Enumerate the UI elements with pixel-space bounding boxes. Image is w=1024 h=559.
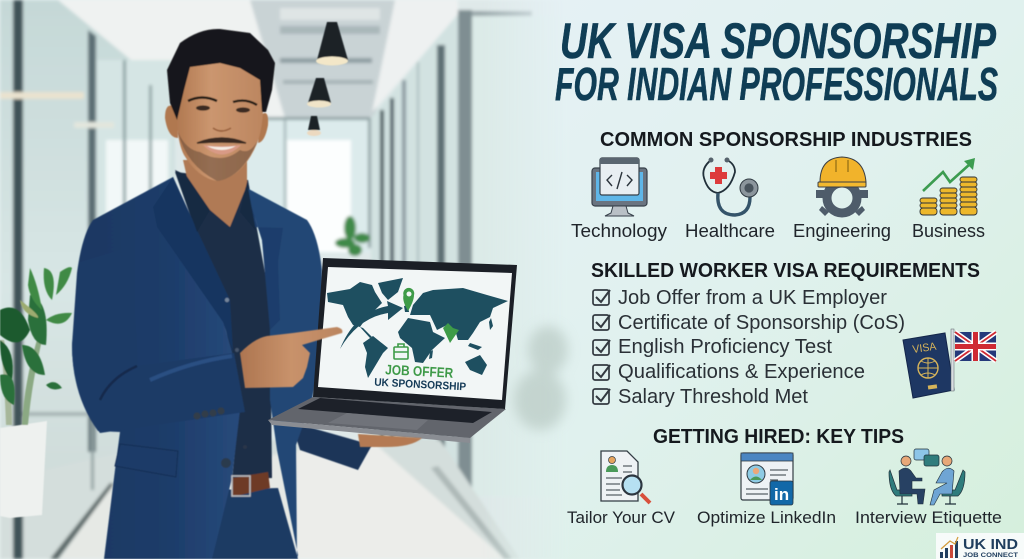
icon: healthcare stethoscope [703, 158, 758, 215]
trousers [210, 488, 298, 559]
pointing hand [240, 327, 342, 388]
moustache and smile [197, 138, 246, 143]
right lapel [245, 187, 283, 330]
neck [183, 160, 247, 227]
icon: optimize linkedin profile: in [774, 485, 789, 504]
section heading: getting hired key tips: GETTING HIRED: KEY TIPS [653, 426, 904, 448]
logo: UK IND job connect [936, 533, 1024, 559]
item: job offer: Job Offer from a UK Employer [618, 287, 887, 309]
laptop screen [318, 267, 512, 400]
label: tailor your cv: Tailor Your CV [567, 508, 676, 527]
item: certificate: Certificate of Sponsorship (CoS) [618, 312, 905, 334]
icon: passport and UK flag: VISA [912, 341, 938, 356]
ears [165, 106, 178, 138]
title [555, 13, 998, 110]
item: salary: Salary Threshold Met [618, 386, 808, 408]
icon: passport and UK flag [903, 329, 996, 398]
right information panel background [460, 0, 1024, 559]
label: technology: Technology [571, 221, 667, 241]
logo: UK IND job connect: JOB CONNECT [963, 552, 1018, 559]
label: business: Business [912, 221, 985, 241]
belt [232, 472, 270, 497]
label: optimize linkedin: Optimize LinkedIn [697, 508, 836, 527]
presenter in navy suit [72, 29, 372, 559]
location pin [403, 288, 414, 311]
eyes and brows [188, 98, 217, 101]
label: interview etiquette: Interview Etiquette [855, 508, 1002, 527]
floor [0, 440, 520, 559]
right arm sleeve [290, 418, 372, 470]
shirt collar [175, 170, 210, 232]
jacket button and pocket [221, 458, 231, 468]
section heading: skilled worker visa requirements: SKILLED WORKER VISA REQUIREMENTS [591, 260, 980, 282]
icon: engineering helmet and gear [816, 157, 868, 217]
item: english: English Proficiency Test [618, 336, 832, 358]
hair [167, 29, 275, 120]
icon: interview etiquette [889, 449, 965, 505]
briefcase icon [394, 344, 408, 359]
logo: UK IND job connect: UK IND [963, 537, 1018, 553]
shirt buttons [225, 298, 229, 302]
uk sponsorship text: UK SPONSORSHIP [374, 377, 466, 393]
plant behind glass [335, 216, 370, 256]
job offer text: JOB OFFER [385, 361, 454, 381]
world map [327, 278, 508, 378]
laptop with job offer map [268, 258, 517, 443]
laptop lid [313, 258, 517, 409]
arrow [340, 301, 403, 349]
ceiling pendant lamps [307, 22, 348, 136]
icon: optimize linkedin profile [741, 453, 793, 505]
stubble [178, 132, 258, 181]
glass wall frames [13, 0, 23, 559]
label: engineering: Engineering [793, 221, 891, 241]
icon: tailor CV document [601, 451, 650, 503]
jacket body [72, 177, 240, 559]
nose [213, 128, 231, 131]
icon: technology monitor [592, 158, 647, 216]
shirt [175, 172, 272, 480]
potted plant [0, 267, 72, 518]
checklist: visa requirements [593, 287, 905, 408]
item: qualifications: Qualifications & Experience [618, 361, 865, 383]
label: healthcare: Healthcare [685, 221, 775, 241]
left lapel [153, 177, 233, 352]
section heading: common sponsorship industries: COMMON SPONSORSHIP INDUSTRIES [600, 129, 972, 151]
face [176, 60, 263, 181]
sleeve [72, 250, 245, 433]
supporting hand [358, 434, 422, 447]
India highlight [443, 323, 459, 343]
laptop base [268, 397, 506, 438]
reflected plant in glass [514, 326, 568, 430]
icon: business growth coins [920, 158, 977, 215]
